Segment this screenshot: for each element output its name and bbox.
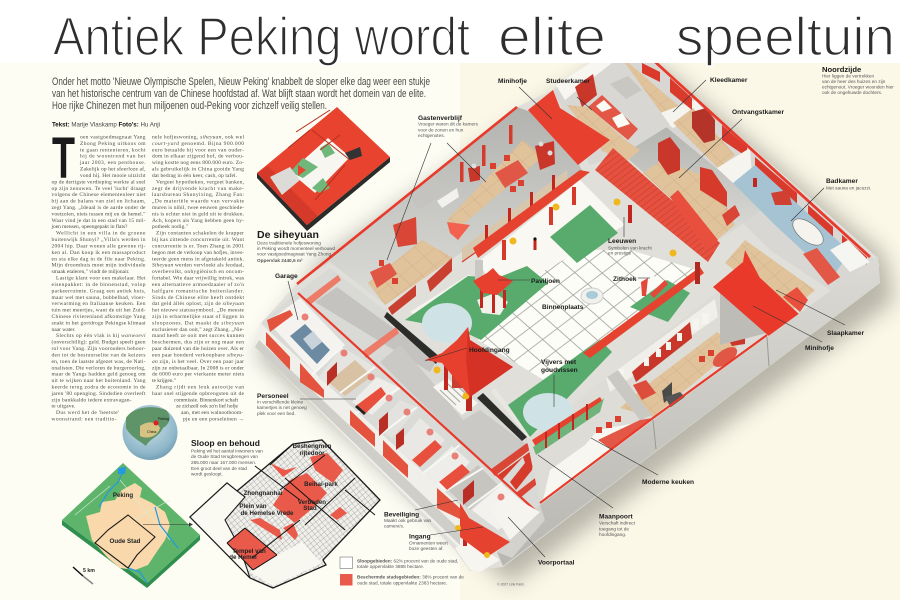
heading: sloop en behoud: 285.000 naar 167.000 mensen. xyxy=(191,460,256,465)
text block: noordzijde: Hier liggen de vertrekken xyxy=(822,74,875,78)
intro text: van het historische centrum van de Chinese hoofdstad af. Wat blijft staan wordt het domein van de elite. xyxy=(52,88,426,100)
article column 1 xyxy=(50,134,146,422)
label: vijvers met goudvissen: goudvissen xyxy=(541,367,578,374)
label: personeel: plek voor een bed. xyxy=(257,411,296,416)
article column 1: maar wel met sauna, bubbelbad, vloer- xyxy=(52,295,146,301)
wardrobes xyxy=(658,137,680,175)
article column 1: rol voor Yang. Zijn voorouders behoor- xyxy=(52,346,146,352)
label: maanpoort: hoofdingang. xyxy=(599,532,626,537)
map labels: Beshengmen xyxy=(293,443,332,450)
article column 1: op zijn zenuwen. Te veel 'lucht' draagt xyxy=(52,186,146,192)
article column 2: het nieuwe statussymbool. „De meeste xyxy=(152,308,245,314)
article column 2: Zhang rijdt een leuk autootje van xyxy=(156,384,244,390)
article column 1: jaar 2003, een penthouse. xyxy=(79,160,146,166)
label: maanpoort xyxy=(538,455,636,537)
roof: red south-east minihofje xyxy=(713,240,815,345)
article column 2: an zijn, is het veel. Over een paar jaar xyxy=(152,359,244,365)
article column 2: te krijgen." xyxy=(152,378,176,384)
article column 2: beschermen, dus zijn er nog maar een xyxy=(152,340,244,346)
roof: study minihofje xyxy=(528,90,610,165)
article column 1: snakt in het gortdroge Pekingse klimaat xyxy=(52,320,146,326)
green garden north-west xyxy=(405,266,548,340)
label: voorportaal: Voorportaal xyxy=(538,560,575,566)
article column 1: volgens de Chinese elementenleer niet xyxy=(52,192,146,198)
article column 1: eisenpakket: in de binnenstad, volop xyxy=(52,282,146,288)
label: hoofdingang: Hoofdingang xyxy=(469,347,510,354)
legend: oude stad, totale oppervlakte 2383 hectare. xyxy=(357,580,447,586)
article column 2: potheek nodig." xyxy=(152,224,188,230)
person xyxy=(534,240,536,250)
small overview model of the house xyxy=(257,107,390,231)
article column 2: euro betaalde hij voor een van ouder- xyxy=(152,147,244,153)
label: maanpoort: toegang tot de xyxy=(599,526,629,532)
article column 1: Zakelijk op het sfeerloze af, xyxy=(80,166,146,173)
label: binnenplaats: Binnenplaats xyxy=(542,304,584,311)
label: paviljoen xyxy=(498,278,560,285)
kitchen rail wall xyxy=(532,397,604,455)
red wall panels xyxy=(266,310,462,520)
article column 2: dat bedrag in één keer, cash, op tafel. xyxy=(152,172,238,179)
scale bar: 5 km xyxy=(73,567,95,584)
red outer line north-east xyxy=(653,60,870,257)
label: slaapkamer: Slaapkamer xyxy=(827,330,864,337)
label: zithoek: Zithoek xyxy=(613,276,637,283)
label: badkamer: Met sauna en jacuzzi. xyxy=(826,186,871,190)
article column 2 xyxy=(152,134,245,422)
intro text: Onder het motto 'Nieuwe Olympische Spelen, Nieuw Peking' knabbelt de sloper elke dag weer een stukje xyxy=(52,76,430,88)
label: hoofdingang xyxy=(425,347,510,361)
bath sink xyxy=(830,240,870,272)
label: personeel: In verschillende kleine xyxy=(257,400,304,404)
article column 1: naar water. xyxy=(52,327,76,333)
article column 2: nis is echter niet in geld uit te drukken. xyxy=(152,211,245,217)
label: leeuwen: en prestige xyxy=(608,250,632,256)
map labels: Verboden xyxy=(298,499,326,506)
map labels: Tempel van xyxy=(232,548,266,555)
article column 2: concurrentie is er. Toen Zhang in 2001 xyxy=(152,244,244,250)
panel: north-east wing rooms xyxy=(605,60,880,300)
label: gastenverblijf: Vroeger waren dit de kamers xyxy=(418,122,479,126)
article column 2: haar snel stijgende opbrengsten uit de xyxy=(152,391,245,397)
label: garage xyxy=(275,273,298,320)
article column 2: overbevolkt, onhygiënisch en oncom- xyxy=(152,269,244,275)
label: moderne keuken xyxy=(591,438,694,486)
white partitions xyxy=(717,148,752,185)
article column 2: fortabel. Wie daar vrijwillig introk, was xyxy=(152,274,244,282)
heading: sloop en behoud: de Oude Stad terugbrengen van xyxy=(191,454,258,459)
title: Antiek Peking wordt xyxy=(53,7,470,67)
article column 2: begon met de verkoop van hofjes, inves- xyxy=(152,249,244,256)
article column 1: jaren '80 openging. Sindsdien overleeft xyxy=(50,390,146,397)
label: studeerkamer: Studeerkamer xyxy=(546,78,590,85)
article column 2: halfgare romantische buitenlander. xyxy=(152,287,245,294)
map labels: rijtedoor xyxy=(299,450,325,457)
heading: de siheyuan: Oppervlak 2440,5 m² xyxy=(257,258,303,263)
article column 1: zijn bankkaldo iedere extravagan- xyxy=(52,397,132,403)
label: ontvangstkamer xyxy=(679,109,784,178)
map: demolition and protected areas xyxy=(190,440,380,588)
label: minihofje east xyxy=(753,306,834,352)
article column 2: laarsbureau Shunyixing, Zhang Fan: xyxy=(152,192,244,198)
globe xyxy=(122,405,178,460)
label: badkamer xyxy=(791,178,871,221)
article column 2: pje en een porseleinen → xyxy=(183,416,244,422)
article column 2: dat geld állés oplost, zijn de siheyuan xyxy=(152,301,244,307)
columns and lanterns under guest wing bar xyxy=(475,187,676,280)
article column 2: sloopzones. Dat maakt de siheyuan xyxy=(152,320,244,326)
roof: long north-east hall xyxy=(595,148,720,284)
article column 2: Vergeet hypotheken, vergeet banken, xyxy=(156,179,245,185)
map labels xyxy=(229,443,338,561)
article column 2: court-yard genoemd. Bijna 900.000 xyxy=(152,141,244,147)
label: personeel: kamertjes is net genoeg xyxy=(257,405,307,410)
article column 2: als gebruikelijk in China gooide Yang xyxy=(152,167,244,173)
article column 2: zijn in erbarmelijke staat of liggen in xyxy=(152,313,244,320)
byline: Tekst: Marije Vlaskamp Foto's: Hu Anji xyxy=(52,122,160,128)
label: minihofje north: Minihofje xyxy=(498,78,527,85)
text block: noordzijde xyxy=(822,65,894,95)
article column 2: commissie. Binnenkort schaft xyxy=(174,396,238,403)
article column 1: woonstrand: een traditio- xyxy=(52,416,117,422)
heading: de siheyuan xyxy=(257,229,336,263)
panel: courtyard tiles xyxy=(405,180,704,437)
doors xyxy=(327,362,474,505)
red inner boundary line xyxy=(298,293,538,513)
map labels: Zhongnanhai xyxy=(244,490,283,497)
label: ontvangstkamer: Ontvangstkamer xyxy=(732,109,784,116)
label: moderne keuken: Moderne keuken xyxy=(642,479,694,486)
red lamps xyxy=(302,314,504,500)
article column 1: oen vastgoedmagnaat Yang xyxy=(80,134,146,140)
article column 1: Waar vind je dat in een stad van 15 mil- xyxy=(52,218,146,224)
panel: study room xyxy=(528,63,670,165)
heading: de siheyuan: voor vastgoedmagnaat Yang Zhong. xyxy=(257,252,332,256)
scale bar: 5 km: 5 km xyxy=(83,568,95,574)
text block: noordzijde: Noordzijde xyxy=(822,65,861,74)
article column 1: buitenwijk Shunyi? „Villa's werden in xyxy=(52,237,146,243)
article column 2: de 6000 euro per vierkante meter niets xyxy=(152,372,244,378)
pavilion xyxy=(473,268,513,315)
article column 1: op de dertigste verdieping werkte al snel xyxy=(52,179,146,185)
heading: sloop en behoud: Sloop en behoud xyxy=(191,438,260,448)
article column 1: Lastige klant voor een makelaar. Het xyxy=(56,276,146,282)
heading: sloop en behoud: Een groot deel van de stad xyxy=(191,466,247,471)
heading: de siheyuan: Deze traditionele hofjeswoning xyxy=(257,240,321,246)
article column 1: 2004 hip. Daar wonen alle gewone rij- xyxy=(52,244,146,250)
article column 2: nele hofjeswoning, siheyuan, ook wel xyxy=(152,134,244,140)
label: beveiliging: Maakt ook gebruik van xyxy=(384,518,432,523)
title xyxy=(53,7,895,67)
label: leeuwen: Symbolen van kracht xyxy=(608,246,652,250)
roof: east long bar xyxy=(583,267,704,358)
protected red areas xyxy=(227,453,347,570)
label: leeuwen xyxy=(608,217,652,256)
red line kitchen wall xyxy=(540,335,767,503)
garage car xyxy=(290,324,330,364)
heading: de siheyuan: in Peking wordt momenteel verbouwd xyxy=(257,246,336,251)
south-east outer wall xyxy=(497,256,880,566)
house shadow xyxy=(255,65,895,585)
article column 2: exclusiever dan ooit," zegt Zhang. „Nie- xyxy=(152,327,244,333)
map: Peking overview xyxy=(62,463,200,588)
article column 2: zijn ze onbetaalbaar. In 2008 is er onder xyxy=(152,365,244,371)
label: ingang: Ornamenten weert xyxy=(409,540,449,546)
gate tower: hoofdingang xyxy=(425,327,513,415)
article column 2: Zijn contanten schakelen de krapper xyxy=(156,231,244,237)
intro text xyxy=(52,76,430,112)
label: zithoek xyxy=(613,276,650,283)
globe: China xyxy=(147,430,156,434)
label: minihofje north xyxy=(498,78,552,119)
article column 1: keerde terug zodra de economie in de xyxy=(52,384,146,390)
article column 2: ze zichzelf ook zo'n lief hofje xyxy=(176,403,239,410)
article column 1: verwarming en Italiaanse keuken. Een xyxy=(52,301,146,307)
arrow: overview to detail xyxy=(143,522,193,526)
label: beveiliging: Beveiliging xyxy=(384,512,419,518)
article column 2: dom in elkaar zijgend hof, de verbou- xyxy=(152,153,244,160)
red outer line of guest wing xyxy=(297,107,517,284)
article column 2: muren is nihil, twee eeuwen geschiede- xyxy=(152,205,244,211)
article column 2: teerde geen mens in afgetakeld antiek. xyxy=(152,255,245,262)
article column 2: wing kostte nog eens 800.000 euro. Zo- xyxy=(152,160,244,166)
label: badkamer: Badkamer xyxy=(826,178,858,185)
label: beveiliging: camera's. xyxy=(384,524,404,528)
article column 1: parkeerruimte. Graag een antiek huis, xyxy=(52,288,146,294)
article column 1: Wellicht in een villa in de groene xyxy=(56,231,146,237)
guest wardrobes xyxy=(393,217,417,247)
article column 1: zegt Yang. „Ideaal is de aarde onder de xyxy=(52,205,146,211)
map: Peking overview: Oude Stad xyxy=(110,538,141,545)
green garden south-east xyxy=(508,340,612,437)
panel: north-west guest wing xyxy=(297,107,590,320)
article column 1: den tot de bestuurselite van de keizers xyxy=(52,352,146,358)
title: speeltuin xyxy=(676,7,895,67)
label: voorportaal xyxy=(508,517,575,566)
article column 1: en, toen de laatste afgezet was, de Nati- xyxy=(52,358,146,365)
map labels: de Hemelse Vrede xyxy=(241,510,294,517)
article column 1: te uitgave. xyxy=(52,404,76,410)
green garden north-east xyxy=(550,205,618,263)
label: gastenverblijf: echtgenotes. xyxy=(418,133,445,138)
map labels: de Hemel xyxy=(229,554,257,561)
article column 2: Siheyuan werden vervloekt als feodaal, xyxy=(152,262,245,269)
label: paviljoen: Paviljoen xyxy=(531,278,560,285)
map labels: Plein van xyxy=(239,503,267,510)
red columns xyxy=(460,125,512,182)
top white band xyxy=(0,0,900,63)
panel: south side wing xyxy=(527,290,770,503)
article column 1: Zhong Peking uitkoos om xyxy=(80,141,146,147)
legend: Sloopgebieden: 62% procent van de oude stad, xyxy=(357,558,458,564)
label: kleedkamer: Kleedkamer xyxy=(710,77,748,84)
article column 1: Dus werd het de 'heetste' xyxy=(56,410,119,416)
entrance gate: ingang xyxy=(455,495,545,572)
illustration: siheyuan house xyxy=(255,60,880,572)
map labels: Beihai-park xyxy=(304,481,338,488)
panel: central corridor with moon gate xyxy=(298,268,563,513)
label: ingang: Ingang xyxy=(409,534,431,540)
article column 1: smaak etaleren," vindt de miljonair. xyxy=(52,269,130,275)
article column 1: Chinese rivierenland afkomstige Yang xyxy=(52,313,146,320)
text block: noordzijde: ook de ongehuwde dochters. xyxy=(822,90,882,95)
article column 1: en sta elke dag in de file naar Peking. xyxy=(52,255,146,262)
legend: totale oppervlakte 3888 hectare. xyxy=(357,564,424,569)
article column 2: Ach, kopers als Yang hebben geen hy- xyxy=(152,218,244,224)
article column 2: bij kas zittende concurrentie uit. Want xyxy=(152,237,244,243)
label: ingang xyxy=(409,527,483,551)
label: personeel xyxy=(257,393,356,416)
drop cap T: T xyxy=(52,126,75,191)
article column 1: vond hij. Het mooie uitzicht xyxy=(80,173,146,179)
globe: Peking xyxy=(158,417,169,421)
credit: © 2007 Link Paris xyxy=(497,582,524,586)
text block: noordzijde: echtgenoot. Vroeger woonden hier xyxy=(822,84,894,90)
article column 1: onalisten. Die verloren de burgeroorlog, xyxy=(52,365,146,371)
article column 1: hij de woontrend van het xyxy=(80,154,146,160)
green garden east xyxy=(630,280,690,322)
article column 1: tuin met meertjes, want de uit het Zuid- xyxy=(52,308,146,314)
label: minihofje east: Minihofje xyxy=(805,345,834,352)
map labels: Stad xyxy=(303,505,317,512)
moon gate xyxy=(498,448,535,490)
bathroom blue floor xyxy=(733,165,850,278)
legend: Beschermde stadsgebieden: 38% procent van de xyxy=(357,574,464,580)
wardrobe xyxy=(724,313,745,346)
beds xyxy=(355,387,470,492)
heading: sloop en behoud: Peking wil het aantal inwoners van xyxy=(191,448,263,454)
article column 1: voetzolen, niets tussen mij en de hemel." xyxy=(52,211,146,217)
article column 1: Slechts op één vlak is hij wanwoevi xyxy=(56,333,146,339)
article column 2: Sinds de Chinese elite heeft ontdekt xyxy=(152,294,244,301)
label: gastenverblijf: Gastenverblijf xyxy=(418,115,463,122)
label: maanpoort: Verschaft indirect xyxy=(599,520,636,526)
label: gastenverblijf: voor de zonen en hun xyxy=(418,128,464,132)
label: leeuwen: Leeuwen xyxy=(608,238,636,245)
article column 1: Mijn droomhuis moet mijn individuele xyxy=(52,263,146,269)
article column 2: een alternatieve armoedzaaier of zo'n xyxy=(152,281,244,288)
article column 1: joen mensen, opeengepakt in flats? xyxy=(50,223,128,230)
red outer panels xyxy=(642,63,867,265)
wall with windows xyxy=(462,170,568,262)
article column 2: zegt de drijvende kracht van make- xyxy=(152,186,244,192)
article column 1: maar de Yangs hadden geld genoeg om xyxy=(52,372,146,378)
article column 2: „De materiële waarde van vervakte xyxy=(152,199,245,205)
label: vijvers met goudvissen: Vijvers met xyxy=(541,359,577,366)
intro text: Hoe rijke Chinezen met hun miljoenen oud-Peking voor zichzelf veilig stellen. xyxy=(52,100,327,112)
round fountain xyxy=(581,288,603,304)
article column 2: paar duizend van die huizen over. Als er xyxy=(152,346,244,352)
label: personeel: Personeel xyxy=(257,393,289,400)
article column 2: een paar honderd verkoopbare siheyu- xyxy=(152,352,244,358)
label: ingang: boze geesten af. xyxy=(409,546,444,551)
map: Peking overview: Peking xyxy=(113,492,133,499)
label: gastenverblijf xyxy=(387,115,486,260)
article column 2: mand heeft ze ooit met succes kunnen xyxy=(152,332,244,339)
label: kleedkamer xyxy=(673,77,748,112)
white walkway xyxy=(478,180,625,295)
panel: south-west staff wing xyxy=(255,292,538,553)
label: studeerkamer xyxy=(546,78,592,110)
windows facing garden xyxy=(388,285,416,315)
article column 1: bij aan de balans van ziel en lichaam, xyxy=(52,199,146,205)
tables and chairs xyxy=(495,160,528,188)
text block: noordzijde: van de heer des huizes en zijn xyxy=(822,79,886,84)
label: beveiliging xyxy=(384,500,458,528)
legend xyxy=(340,557,464,586)
article column 2: aan, met een walnootboom- xyxy=(181,410,243,416)
article column 1: te gaan rentenieren, kocht xyxy=(80,147,146,153)
heading: de siheyuan: De siheyuan xyxy=(257,229,319,241)
label: garage: Garage xyxy=(275,273,298,280)
label: maanpoort: Maanpoort xyxy=(599,514,634,520)
title: elite xyxy=(498,7,606,67)
article column 1: (onverschillig): geld. Budget speelt geen xyxy=(52,339,146,346)
house base platform xyxy=(255,60,880,571)
label: slaapkamer xyxy=(776,290,864,337)
label: vijvers met goudvissen xyxy=(541,359,578,407)
partitions xyxy=(312,347,502,508)
article column 1: uit te wijken naar het buitenland. Yang xyxy=(52,378,146,384)
article column 1: ken al. Dan koop ik een massaproduct xyxy=(52,250,146,256)
heading: sloop en behoud xyxy=(191,438,263,476)
heading: sloop en behoud: wordt gesloopt. xyxy=(191,472,223,476)
